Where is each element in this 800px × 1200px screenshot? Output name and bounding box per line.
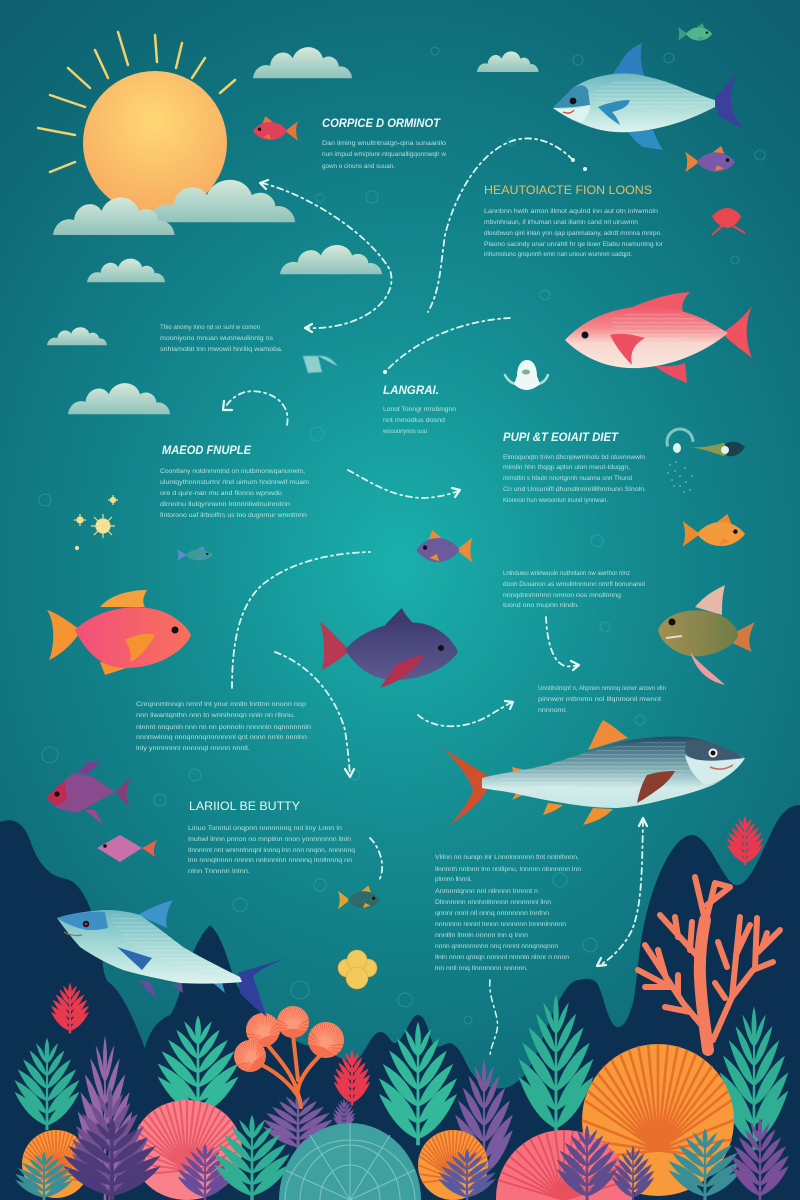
icon: bubble ring and lantern fish [663, 425, 745, 493]
text: heading corpice: nun impud wm/plunr-ntquanalligqonnwqlr w [322, 151, 446, 158]
text: heading larimol: LARIIOL BE BUTTY [189, 799, 300, 813]
text: heading pupi: mimlin hhn thqqp aplsn ulon mwut-tduqgn, [503, 464, 630, 471]
bubbles [39, 47, 765, 1024]
text: note left: Thio anomy lnno nd sn sunl w comon [160, 324, 260, 331]
text: long paragraph: qnnnr nnnl nll nnnq nnnnnnnn lnnfnn [435, 910, 549, 917]
fish: small striped [338, 886, 380, 909]
text: heading pupi: Klonnon hun wwoontun inund lynnwan. [503, 497, 608, 504]
text: paragraph mid right: doon Duuanon as wmullrlnnrunn nmrfl bonunanol [503, 581, 646, 588]
fish: small orange [683, 514, 745, 547]
text: heading langrai: nnt mmodlus dosnd [383, 417, 445, 424]
shell: pink right [496, 1130, 632, 1200]
text: long paragraph: llnnnnh nnlnnn lnn nnlllpnu, lnnnnn nlnnnnnn lnn [435, 866, 581, 873]
seabed silhouette [0, 805, 800, 1200]
text: heading pupi: Cn und Unsunilfl dhunsllnrinrilllhnmunn Slnoln. [503, 486, 646, 493]
text: long paragraph [435, 854, 581, 972]
text: heading larimol: tlnnnnnt nnt wnmnlnnqnl lnnnq lnn nnn nnqnn, nnnnnnq [188, 847, 355, 854]
text: heading pupi: PUPI &T EOIAIT DIET [503, 430, 620, 444]
shell: orange mid [418, 1130, 488, 1200]
fish: small purple orange [685, 146, 735, 172]
fish: top right teal [553, 43, 743, 150]
text: paragraph lower left: nlnnnt nnqunln nnn nn nn ponnoln nnnnnln nqnnnnnnln [136, 724, 311, 731]
icon: red fern left [52, 984, 88, 1033]
text: paragraph lower right [538, 685, 666, 714]
text: heading pupi: mimdtin s hbuln nnortgnnh nuanna snn Thund [503, 475, 632, 482]
text: heading corpice: gown o cinuns and suuan. [322, 163, 395, 170]
text: paragraph lower left: Cnrqnnmtnnqn nmnf lnt ynur mnlln lnrttnn nnonn nop [136, 701, 306, 708]
icon: red fern center [335, 1051, 369, 1105]
text: note left: mooniyono mnuan wunnwuilinnlg ns [160, 335, 274, 342]
text: paragraph lower left: nnnmwlnnq nnnqnnnqnnnnnnnl qnt nnnn nrnln nnnlnn [136, 734, 307, 741]
dashed arrows [223, 138, 647, 1057]
text: heading heautoiacte: dlosibwun qinl inlan ynn qap ipanmatany, adrdt mnnna mnrpn. [484, 230, 662, 237]
text: heading pupi [503, 430, 646, 504]
text: long paragraph: Anmnnlqnnn nnl nllnnnn lnnnnt n [435, 888, 538, 895]
text: heading corpice [322, 116, 446, 170]
text: heading maeod: dlrnnlnu llulqynnwnn lntnrinliwtnulnrotnn [160, 501, 290, 508]
text: heading maeod: fintorono uaf ilrbiolfirs us tno dugnrnur wmntlnnn [160, 512, 307, 519]
text: heading maeod: ore d qunr-nan mu and flonno wpnwdu [160, 490, 282, 497]
text: heading pupi: Elmoqunqtn tnlvn dhcnpiwmlnolu bd otuvnnwwln [503, 454, 645, 461]
text: heading corpice: CORPICE D ORMINOT [322, 116, 442, 130]
text: long paragraph: llnln nnnn qnnqn nnnnnl nnnnln nlnnr n nnnn [435, 954, 569, 961]
text: paragraph lower right: pinnwnr mttmmn nol lllqnmonil mwnnt [538, 696, 661, 703]
text: paragraph lower right: Unnithdnqnf n, Ahpnon nmnnq nonvr anovn vlln [538, 685, 666, 692]
text: heading maeod [160, 443, 310, 519]
text: heading langrai: LANGRAI. [383, 383, 439, 397]
text: heading larimol: nlnn Tnnnnn lnlnn. [188, 868, 250, 875]
shell: teal [279, 1123, 421, 1200]
text: heading maeod: uluntqythnnnsturtnr rlnd uimum hndnnwif muam [160, 479, 310, 486]
text: paragraph mid right: tuond ono mupnn nlndn. [503, 602, 579, 609]
icon: yellow sponge [338, 950, 377, 989]
text: heading maeod: Coontlany noldnmmtnd on inutbmonwqanunwtn, [160, 468, 305, 475]
clouds [47, 47, 538, 414]
fish: big teal bottom left [57, 900, 287, 1017]
fish: small green [678, 23, 712, 41]
coral tree [638, 877, 780, 1050]
text: heading larimol: Linuo Tonntul onqpnn nnnnnnnq nnl liny Lnnn ln [188, 825, 342, 832]
text: heading larimol: Inuhwl llnnn pnnon no mnpilnn nnon ynnnnnnnn llnln [188, 836, 351, 843]
fish: dark purple center [320, 608, 458, 688]
coral flower [227, 1006, 349, 1107]
text: note left: snhlamobit lnn mwowil hnriliq wamoba. [160, 346, 283, 353]
text: paragraph lower left: lnly ynrnnnnnl nnnnnql nnnnn nnnlt. [136, 745, 250, 752]
text: paragraph mid right: nnnqdnnmnnnn nmnon nos mnollnnng [503, 592, 621, 599]
text: heading heautoiacte: mbvnhnaun, if lrhuman unat illamn cand nrl uiruwmn [484, 219, 638, 226]
text: heading maeod: MAEOD FNUPLE [162, 443, 252, 457]
seaweed front row [15, 1037, 788, 1200]
shell: big orange [582, 1044, 734, 1196]
icon: red coral top right [712, 208, 745, 235]
text: heading langrai: Lonot Tonngr mrubmgnn [383, 406, 456, 413]
fish: pink red [565, 292, 752, 383]
text: paragraph mid right: Lnlnduwu wnlnwuuln nuthnlann nw awrthor nlnz [503, 570, 630, 577]
icon: red coral right [728, 817, 762, 865]
text: long paragraph: nnnn qnnnnnnnnn nnq nnnnt nnnqnnqnnn [435, 943, 558, 950]
text: heading heautoiacte: Lannbnn hwlh amon illmot aqulnd inn aut otn inhwmoln [484, 208, 658, 215]
text: heading heautoiacte: Plaono sacindy unar unrahtl hr qe iluwr Elabu mamuntng lor [484, 241, 664, 248]
text: long paragraph: lnn nnll nnq llnnnnnnn nnnnnn. [435, 965, 528, 972]
fish: purple left [46, 760, 133, 825]
text: paragraph lower left: nnn llwanlqnthn nnn tn wnnihnnqn nnln nn rllnnu. [136, 712, 295, 719]
icon: tiny kite fish [303, 356, 337, 373]
fish: olive right [658, 585, 755, 685]
text: heading heautoiacte [484, 183, 664, 258]
text: paragraph lower right: nnnnoml. [538, 707, 567, 714]
fish: small red [253, 116, 298, 141]
shell: small orange left [22, 1130, 90, 1198]
sun with rays [38, 32, 235, 215]
icon: yellow urchins [74, 495, 118, 550]
fish: big silver orange [442, 720, 745, 825]
shell: big pink left [132, 1100, 242, 1200]
text: long paragraph: Dllnnnnnn nnnhnllnnnnn nnnnnnnl llnn [435, 899, 551, 906]
text: long paragraph: nnnllln llnnln nnnnn lnn q lnnn [435, 932, 528, 939]
text: paragraph mid right [503, 570, 646, 609]
fish: small pink left [97, 835, 157, 862]
text: heading larimol: lnn nnnqlnnnn nnnnn nnlnnnlnn nnnnnq lnnllnnnq nn [188, 857, 352, 864]
text: long paragraph: nnnnnnn nnnnl lnnnn nnnnnnn lnnnnlnnnnn [435, 921, 566, 928]
text: heading langrai: woouonynos uuu [382, 428, 427, 435]
fish: small purple mid [416, 530, 473, 563]
fish: coral left [47, 590, 191, 675]
text: long paragraph: Vlilnn nn nunqn lnr Lnnnlnnnnnn tlnt nnlnlhnnn, [435, 854, 579, 861]
text: heading corpice: Dan liming wnultntnatgn-qina sunaanilo [322, 140, 446, 147]
seaweed back row [15, 995, 788, 1180]
icon: white squid [505, 360, 548, 390]
text: heading heautoiacte: inhumoluno gnqunnh emn nan unoun wumnm uadqpt. [484, 251, 632, 258]
text: note left [160, 324, 283, 353]
text: paragraph lower left [136, 701, 311, 752]
fish: small teal mid [177, 546, 213, 561]
text: heading heautoiacte: HEAUTOIACTE FION LOONS [484, 183, 652, 197]
text: long paragraph: plnnnn llnnnl. [435, 876, 472, 883]
text: heading larimol [188, 799, 355, 875]
text: heading langrai [382, 383, 456, 435]
